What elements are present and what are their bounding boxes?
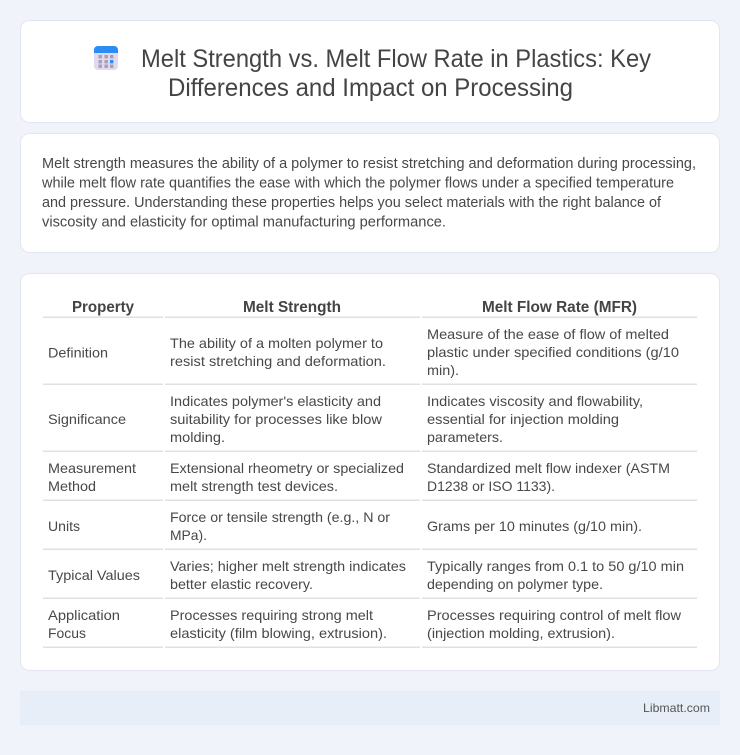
- row: typical values: depending on polymer type.: [427, 576, 603, 592]
- footer credit: Libmatt.com: [643, 701, 710, 715]
- footer: [20, 691, 720, 725]
- table header: Property: [72, 299, 134, 316]
- row: typical values: [43, 558, 697, 599]
- row: measurement method: melt strength test devices.: [170, 478, 338, 494]
- title: Melt Strength vs. Melt Flow Rate in Plastics: Key: [141, 45, 651, 73]
- panel: comparison table: [20, 274, 720, 670]
- panel: summary: [20, 134, 720, 252]
- row: application focus: [43, 607, 697, 648]
- row: units: Units: [48, 518, 80, 534]
- row: significance: Indicates polymer's elasticity and: [170, 393, 381, 409]
- row: significance: Significance: [48, 411, 126, 427]
- row: significance: essential for injection molding: [427, 411, 619, 427]
- row: units: [43, 509, 697, 550]
- row: definition: Measure of the ease of flow of melted: [427, 326, 669, 342]
- row: measurement method: Standardized melt flow indexer (ASTM: [427, 460, 670, 476]
- row: typical values: Typically ranges from 0.1 to 50 g/10 min: [427, 558, 684, 574]
- row: measurement method: Measurement: [48, 460, 136, 476]
- row: definition: resist stretching and deformation.: [170, 353, 386, 369]
- row: units: Grams per 10 minutes (g/10 min).: [427, 518, 642, 534]
- row: definition: Definition: [48, 344, 108, 360]
- row: definition: [43, 326, 697, 385]
- summary text: Melt strength measures the ability of a polymer to resist stretching and deformation during processing,: [42, 156, 696, 172]
- row: measurement method: [43, 460, 697, 501]
- row: definition: plastic under specified conditions (g/10: [427, 344, 679, 360]
- row: significance: molding.: [170, 429, 225, 445]
- row: units: Force or tensile strength (e.g., N or: [170, 509, 390, 525]
- summary text: [41, 156, 696, 230]
- header panel: [20, 20, 720, 122]
- table header: [43, 299, 697, 318]
- row: application focus: Processes requiring strong melt: [170, 607, 373, 623]
- row: measurement method: Method: [48, 478, 96, 494]
- title: Differences and Impact on Processing: [168, 74, 573, 102]
- summary text: while melt flow rate quantifies the ease with which the polymer flows under a specified temperature: [41, 176, 674, 192]
- row: units: MPa).: [170, 527, 207, 543]
- title: [141, 45, 651, 102]
- row: application focus: Processes requiring control of melt flow: [427, 607, 682, 623]
- row: typical values: Typical Values: [48, 567, 140, 583]
- summary text: and pressure. Understanding these properties helps you select materials with the right balance of: [42, 195, 662, 211]
- row: typical values: Varies; higher melt strength indicates: [170, 558, 406, 574]
- row: application focus: Application: [48, 607, 120, 623]
- row: definition: min).: [427, 362, 459, 378]
- row: application focus: (injection molding, extrusion).: [427, 625, 615, 641]
- row: measurement method: Extensional rheometry or specialized: [170, 460, 404, 476]
- row: application focus: elasticity (film blowing, extrusion).: [170, 625, 387, 641]
- row: significance: suitability for processes like blow: [170, 411, 383, 427]
- table header: Melt Strength: [243, 299, 341, 316]
- row: typical values: better elastic recovery.: [170, 576, 313, 592]
- row: definition: The ability of a molten polymer to: [170, 335, 383, 351]
- icon: calendar: [94, 46, 118, 70]
- row: application focus: Focus: [48, 625, 86, 641]
- row: measurement method: D1238 or ISO 1133).: [427, 478, 555, 494]
- row: significance: [43, 393, 697, 452]
- table header: Melt Flow Rate (MFR): [482, 299, 637, 316]
- row: significance: parameters.: [427, 429, 503, 445]
- row: significance: Indicates viscosity and flowability,: [427, 393, 643, 409]
- summary text: viscosity and elasticity for optimal manufacturing performance.: [42, 214, 446, 230]
